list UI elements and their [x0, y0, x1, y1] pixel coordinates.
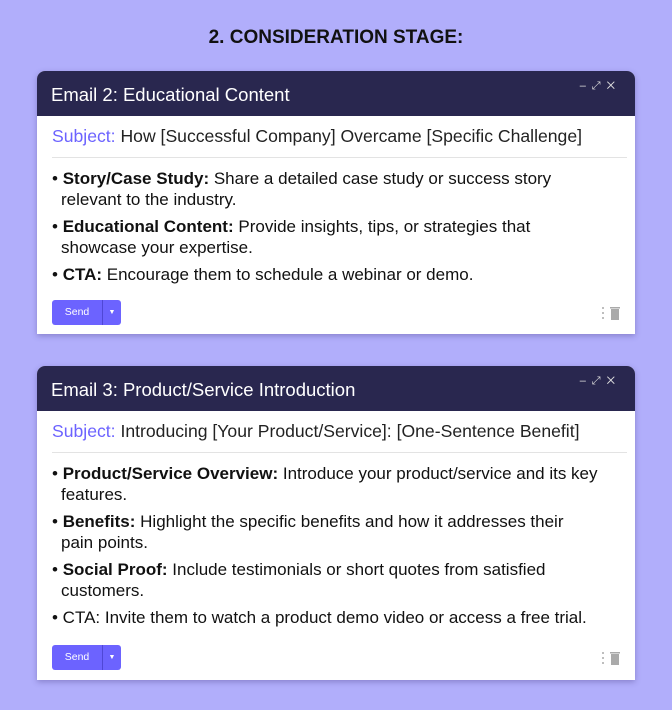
panel: email 2 [37, 71, 635, 334]
bullet list: relevant to the industry. [61, 190, 236, 209]
bullet list [52, 169, 552, 284]
bullet list: • CTA: Encourage them to schedule a webinar or demo. [52, 265, 473, 284]
header: email 2: –⤢✕ [580, 80, 621, 92]
bullet list: • Benefits: Highlight the specific benefits and how it addresses their [52, 512, 564, 531]
bullet list: • CTA: Invite them to watch a product demo video or access a free trial. [52, 608, 587, 627]
header: email 3: –⤢✕ [580, 375, 621, 387]
bullet list: showcase your expertise. [61, 238, 253, 257]
send button: ▼ [109, 309, 115, 316]
send button: Send [65, 651, 89, 663]
send button [52, 300, 121, 325]
bullet list: pain points. [61, 533, 148, 552]
panel: email 3 [37, 366, 635, 680]
subject line: Subject: Introducing [Your Product/Service]: [One-Sentence Benefit] [52, 421, 579, 441]
send button: ▼ [109, 654, 115, 661]
title: 2. CONSIDERATION STAGE: [209, 27, 463, 48]
bullet list: • Story/Case Study: Share a detailed case study or success story [52, 169, 551, 188]
subject line: Subject: How [Successful Company] Overcame [Specific Challenge] [52, 126, 582, 146]
bullet list: • Educational Content: Provide insights, tips, or strategies that [52, 217, 530, 236]
bullet list [52, 464, 598, 627]
icons: more and trash [602, 652, 620, 665]
bullet list: features. [61, 485, 127, 504]
header: email 2: Email 2: Educational Content [51, 84, 290, 105]
icons: more and trash [602, 307, 620, 320]
header: email 3 [37, 366, 635, 411]
send button: Send [65, 306, 89, 318]
header: email 2 [37, 71, 635, 116]
header: email 3: Email 3: Product/Service Introduction [51, 379, 355, 400]
bullet list: • Social Proof: Include testimonials or short quotes from satisfied [52, 560, 546, 579]
bullet list: • Product/Service Overview: Introduce your product/service and its key [52, 464, 598, 483]
bullet list: customers. [61, 581, 144, 600]
send button [52, 645, 121, 670]
